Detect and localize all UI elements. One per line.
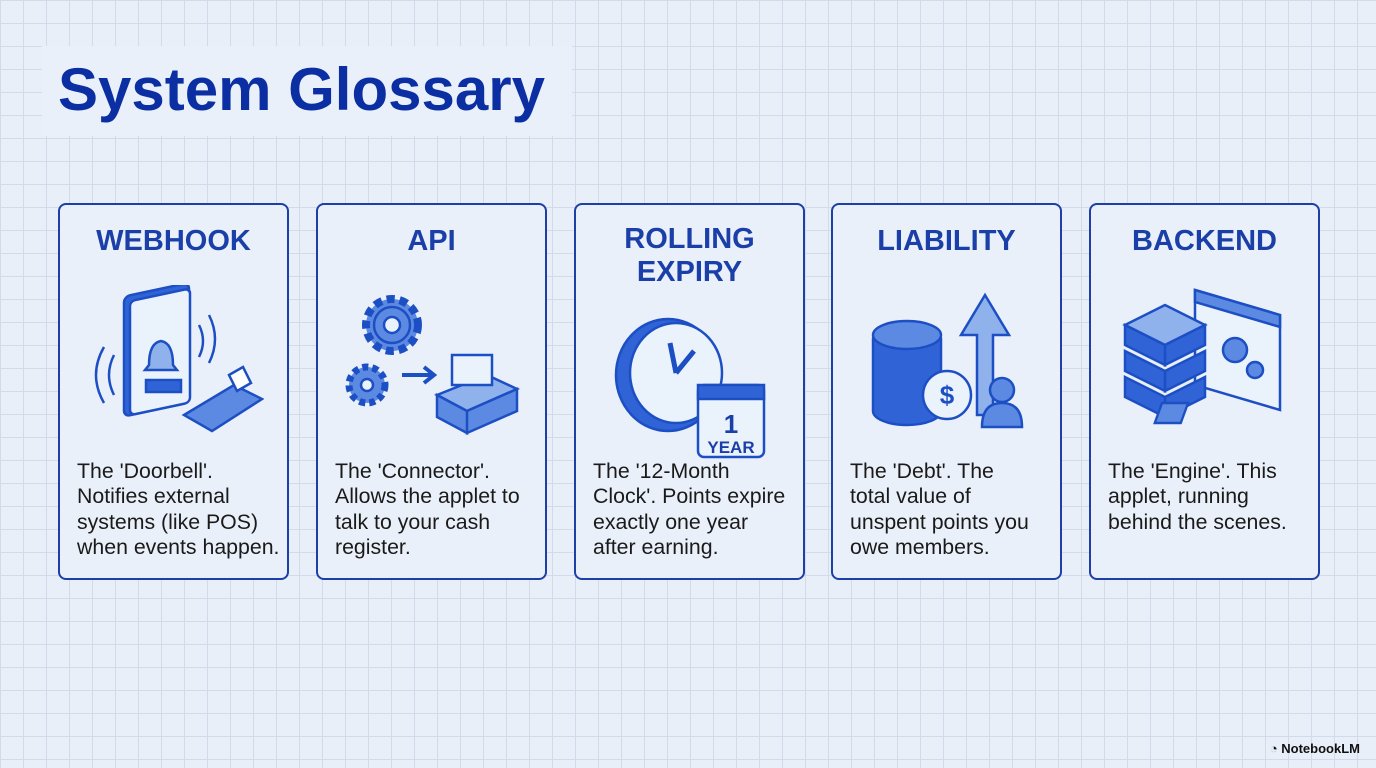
panel: backend: [1089, 203, 1320, 580]
description: owe members.: [850, 535, 990, 559]
description: register.: [335, 535, 411, 559]
description: The 'Connector'.: [335, 459, 490, 483]
description: The '12-Month: [593, 459, 730, 483]
description: [1108, 459, 1287, 534]
title panel: [42, 46, 572, 136]
heading: api: API: [407, 225, 456, 257]
description: The 'Engine'. This: [1108, 459, 1277, 483]
heading: backend: BACKEND: [1132, 225, 1277, 257]
title: System Glossary: [58, 56, 545, 123]
description: The 'Doorbell'.: [77, 459, 213, 483]
description: applet, running: [1108, 484, 1249, 508]
heading: rolling expiry: EXPIRY: [637, 256, 742, 288]
description: Clock'. Points expire: [593, 484, 785, 508]
panel: rolling expiry: [574, 203, 805, 580]
heading: liability: LIABILITY: [877, 225, 1016, 257]
panel: webhook: [58, 203, 289, 580]
heading: rolling expiry: ROLLING: [624, 223, 755, 255]
description: after earning.: [593, 535, 718, 559]
logo: NotebookLM: ◔ NotebookLM: [1270, 741, 1360, 756]
description: systems (like POS): [77, 510, 258, 534]
description: when events happen.: [77, 535, 279, 559]
description: behind the scenes.: [1108, 510, 1287, 534]
description: talk to your cash: [335, 510, 490, 534]
description: exactly one year: [593, 510, 748, 534]
icon: coins, arrow, person: [872, 292, 1024, 428]
description: [77, 459, 279, 559]
description: total value of: [850, 484, 971, 508]
panel: liability: [831, 203, 1062, 580]
icon: gears to cash register: [346, 295, 520, 436]
description: [850, 459, 1029, 559]
icon: servers and window: [1122, 288, 1282, 424]
panel: api: [316, 203, 547, 580]
icon: clock and calendar: 1: [724, 409, 738, 439]
heading: webhook: WEBHOOK: [96, 225, 251, 257]
description: [335, 459, 520, 559]
heading: rolling expiry: [624, 223, 755, 288]
icon: clock and calendar: [614, 318, 766, 458]
icon: coins, arrow, person: $: [940, 380, 955, 410]
description: Notifies external: [77, 484, 230, 508]
icon: clock and calendar: YEAR: [707, 438, 755, 457]
description: Allows the applet to: [335, 484, 520, 508]
description: unspent points you: [850, 510, 1029, 534]
description: [593, 459, 785, 559]
description: The 'Debt'. The: [850, 459, 994, 483]
icon: doorbell and POS: [94, 285, 264, 432]
